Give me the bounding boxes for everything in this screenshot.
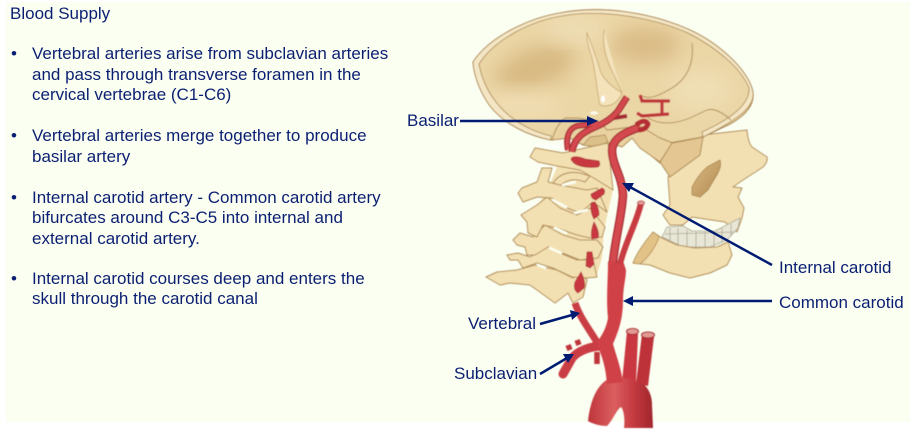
bullet 4: internal carotid course: • — [11, 269, 17, 288]
carotid artery trunk — [597, 254, 626, 384]
skull interior — [473, 10, 753, 163]
bullet 2: vertebral arteries merge: • — [11, 126, 17, 145]
vertebral arteries merging to basilar — [567, 97, 627, 152]
facial bones — [663, 130, 767, 232]
bullet 2: vertebral arteries merge — [11, 126, 367, 166]
cut bone section — [660, 137, 703, 177]
sphenoid piece — [583, 135, 608, 147]
eye orbit — [692, 160, 721, 197]
left subclavian — [636, 332, 654, 386]
vertebra C3 — [518, 168, 607, 213]
foramina — [601, 96, 605, 102]
label: Common carotid: Common carotid — [779, 293, 904, 312]
label: Basilar — [407, 111, 598, 130]
petrous ridge — [642, 43, 731, 123]
bullet 2: vertebral arteries merge: basilar artery — [32, 147, 131, 166]
skull rim — [473, 10, 753, 140]
label: Internal carotid: Internal carotid — [779, 258, 891, 277]
gaps between vertebrae — [538, 182, 587, 268]
aortic arch — [588, 378, 653, 428]
vertebral artery segments in foramina — [571, 157, 605, 293]
label: Common carotid — [623, 293, 904, 312]
vertebra C5 — [513, 225, 603, 260]
spine backing — [530, 148, 613, 278]
vertebra C2 — [530, 143, 613, 190]
vertebral artery — [575, 303, 598, 344]
skull base — [552, 118, 673, 162]
label: Vertebral — [468, 310, 580, 333]
internal carotid — [612, 121, 648, 262]
label: Subclavian — [454, 354, 574, 383]
vertebra C6 — [507, 247, 597, 278]
bullet 1: vertebral arteries arise: Vertebral arteries arise from subclavian arteries — [32, 44, 388, 63]
central ridge — [587, 30, 622, 106]
bullet list — [11, 44, 388, 308]
bullet 1: vertebral arteries arise: and pass through transverse foramen in the — [32, 65, 361, 84]
teeth — [662, 218, 740, 248]
jaw cut surface — [633, 232, 659, 264]
bullet 4: internal carotid course: skull through the carotid canal — [32, 289, 258, 308]
left common carotid — [622, 328, 638, 382]
label: Internal carotid — [622, 183, 891, 277]
bullet 3: internal carotid bifurcation: • — [11, 188, 17, 207]
subclavian artery — [563, 340, 603, 374]
skull shading — [480, 20, 730, 117]
label: Subclavian: Subclavian — [454, 364, 537, 383]
atlas arch — [553, 172, 590, 186]
vertebra C7 — [486, 265, 587, 303]
small cranial vessels — [637, 95, 670, 116]
bullet 1: vertebral arteries arise: • — [11, 44, 17, 63]
bullet 3: internal carotid bifurcation: bifurcates around C3-C5 into internal and — [32, 208, 343, 227]
bullet 1: vertebral arteries arise: cervical vertebrae (C1-C6) — [32, 85, 231, 104]
bullet 1: vertebral arteries arise — [11, 44, 388, 104]
label: Vertebral: Vertebral — [468, 314, 536, 333]
bullet 4: internal carotid course — [11, 269, 365, 308]
bullet 4: internal carotid course: Internal carotid courses deep and enters the — [32, 269, 365, 288]
white gap near atlas — [537, 145, 560, 147]
bullet 3: internal carotid bifurcation: Internal carotid artery - Common carotid artery — [32, 188, 381, 207]
jaw — [633, 232, 732, 278]
external carotid — [620, 203, 641, 264]
bullet 3: internal carotid bifurcation: external carotid artery. — [32, 229, 200, 248]
bullet 3: internal carotid bifurcation — [11, 188, 381, 248]
bullet 2: vertebral arteries merge: Vertebral arteries merge together to produce — [32, 126, 367, 145]
label: Basilar: Basilar — [407, 111, 459, 130]
vertebra C4 — [521, 197, 605, 238]
heading: Blood Supply: Blood Supply — [10, 4, 111, 23]
illustration: skull, spine and arteries — [473, 10, 767, 428]
